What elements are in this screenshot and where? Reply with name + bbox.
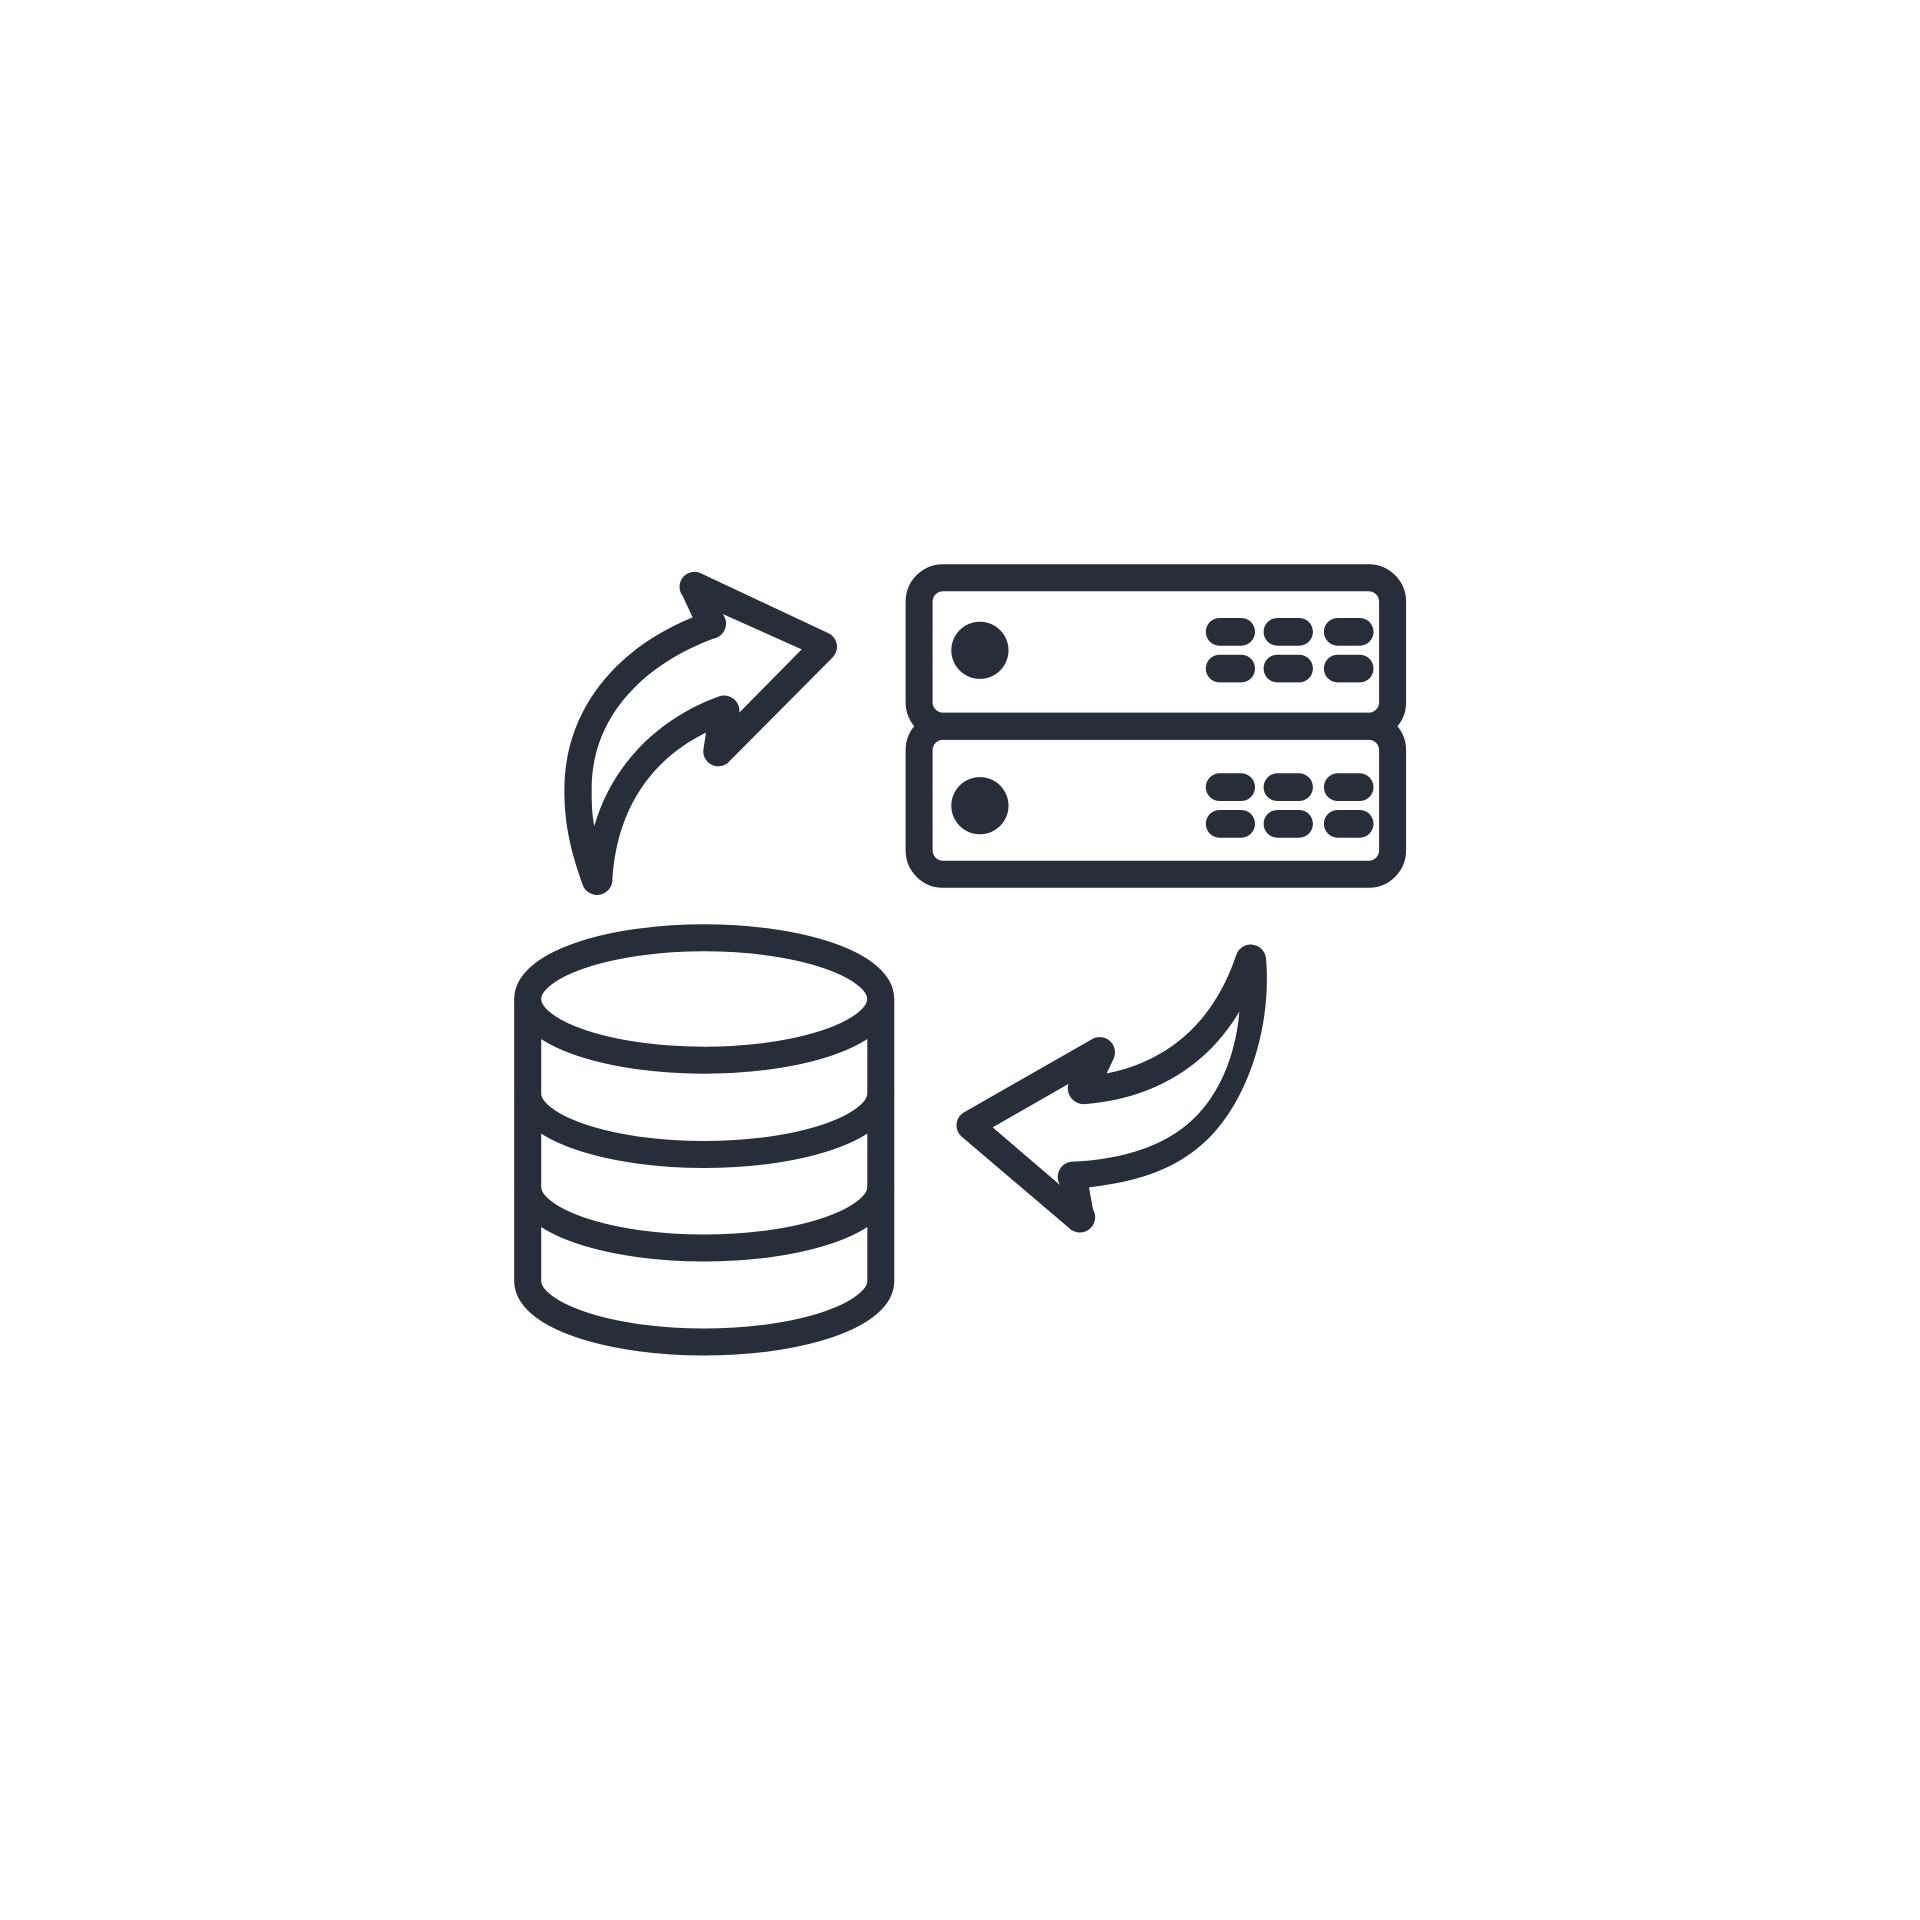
icon: server rack	[919, 578, 1393, 874]
server unit: top	[919, 578, 1393, 726]
server unit: bottom	[919, 726, 1393, 874]
icon: curved arrow from server to database	[956, 945, 1267, 1233]
icon: database cylinder	[528, 938, 881, 1342]
icon: curved arrow from database to server	[564, 572, 837, 895]
